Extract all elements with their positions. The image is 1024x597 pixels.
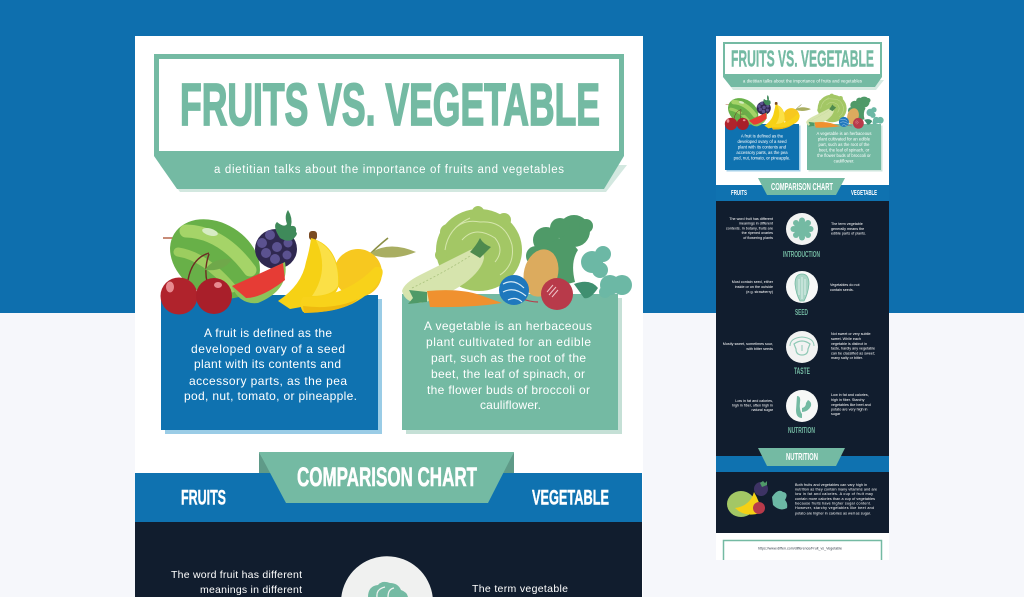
nutrition paragraph: Both fruits and vegetables can vary high in <box>795 483 867 487</box>
row: seed <box>732 271 860 317</box>
seed vegetable text <box>830 283 860 292</box>
intro vegetable text: The term vegetable <box>831 222 863 226</box>
fruit definition text: developed ovary of a seed <box>191 342 345 356</box>
preview fruit illustration <box>723 93 811 130</box>
panel: vegetable definition <box>402 294 622 434</box>
taste vegetable text: vegetable is distinct in <box>831 342 867 346</box>
nutrition fruit text <box>732 399 774 412</box>
intro fruit text: contexts. In botany, fruits are <box>726 226 773 230</box>
watermelon <box>155 203 275 315</box>
fruit intro text: meanings in different <box>200 584 302 596</box>
nutrition fruit text: high in fiber, often high in <box>732 404 773 408</box>
title banner <box>154 54 627 192</box>
preview ribbon <box>758 178 845 195</box>
preview vegetable illustration <box>806 94 884 129</box>
intro fruit text: of flowering plants <box>743 236 773 240</box>
preview fruit text: pod, nut, tomato, or pineapple. <box>734 156 790 160</box>
preview fruit text: developed ovary of a seed <box>737 139 787 144</box>
preview vegetable box <box>807 124 882 172</box>
dark comparison panel <box>135 522 642 597</box>
preview dark panel <box>716 201 889 533</box>
nutrition paragraph: contain more calories than a cup of vegetables <box>795 497 875 501</box>
vegetable definition text: cauliflower. <box>480 398 541 412</box>
taste vegetable text: sweet. While each <box>831 337 861 341</box>
taste vegetable text: many salty or bitter. <box>831 356 863 360</box>
nutrition paragraph: because fruits have higher sugar content. <box>795 501 871 505</box>
intro vegetable text <box>831 222 866 236</box>
zucchini <box>402 238 491 303</box>
illustration: fruits <box>155 203 416 315</box>
vegetable definition text: beet, the leaf of spinach, or <box>431 367 585 381</box>
taste vegetable text: can be classified as sweet; <box>831 351 875 355</box>
nutrition paragraph: low in fat and calories. A cup of fruit may <box>795 492 873 496</box>
preview vegetable text: cauliflower. <box>834 158 854 164</box>
label: taste: TASTE <box>794 366 810 376</box>
small dark leaf <box>574 282 598 298</box>
nutrition fruit text: natural sugar <box>751 408 774 412</box>
preview vegetable text: part, such as the root of the <box>819 142 870 147</box>
potato <box>519 246 563 300</box>
watermelon slice <box>232 262 286 303</box>
preview nutrition band <box>716 456 889 472</box>
preview fruit text: plant with its contents and <box>738 144 787 150</box>
preview fruit box <box>725 124 800 172</box>
lemon with leaf <box>334 238 416 297</box>
illustration: vegetables <box>402 206 632 310</box>
icon: produce shape <box>786 390 818 422</box>
label: nutrition: NUTRITION <box>788 426 815 435</box>
nutrition paragraph: potato are higher in calories as well as sugar. <box>795 512 871 516</box>
source frame <box>724 540 882 560</box>
taste fruit text: Mostly sweet, sometimes sour, <box>723 342 773 346</box>
vegetable definition text: plant cultivated for an edible <box>426 335 591 349</box>
preview nutrition ribbon <box>758 448 845 466</box>
panel: fruit definition <box>161 295 382 434</box>
taste vegetable text <box>831 332 875 360</box>
preview ribbon heading: COMPARISON CHART <box>771 182 833 193</box>
blackberry <box>255 210 297 269</box>
seed fruit text <box>732 280 774 294</box>
intro fruit text: meanings in different <box>739 222 773 226</box>
onion <box>499 275 538 305</box>
nutrition vegetable text: vegetables like beet and <box>831 403 871 407</box>
preview vegetable text <box>817 131 871 164</box>
bananas <box>278 231 383 313</box>
nutrition paragraph <box>795 483 877 516</box>
nutrition paragraph: However, starchy vegetables like beet and <box>795 506 874 510</box>
intro fruit text <box>726 217 773 240</box>
preview vegetable text: the flower buds of broccoli or <box>817 153 871 158</box>
row: nutrition <box>732 390 871 435</box>
row: taste <box>723 331 875 376</box>
preview vegetable text: A vegetable is an herbaceous <box>817 131 871 136</box>
intro vegetable text: edible parts of plants. <box>831 232 866 236</box>
intro fruit text: the ripened ovaries <box>742 231 773 235</box>
fruit definition text: pod, nut, tomato, or pineapple. <box>184 389 357 403</box>
taste vegetable text: Not sweet or very subtle <box>831 332 871 336</box>
preview title: FRUITS VS. VEGETABLE <box>731 46 874 72</box>
nutrition fruit text: Low in fat and calories, <box>735 399 773 403</box>
preview fruit text: A fruit is defined as the <box>741 134 784 138</box>
intro vegetable text: generally means the <box>831 227 864 231</box>
seed vegetable text: Vegetables do not <box>830 283 860 287</box>
comparison band <box>135 473 642 522</box>
illustration: mixed produce <box>727 481 787 517</box>
preview column heading: vegetable: VEGETABLE <box>851 188 877 197</box>
nutrition vegetable text: Low in fat and calories, <box>831 393 869 397</box>
preview comparison band <box>716 185 889 201</box>
icon: flower <box>786 213 818 245</box>
intro fruit text: The word fruit has different <box>729 217 773 221</box>
broccoli <box>526 215 593 286</box>
fruit definition text: A fruit is defined as the <box>204 326 332 340</box>
ribbon: comparison chart <box>259 452 514 503</box>
ribbon heading: COMPARISON CHART <box>297 462 477 492</box>
seed fruit text: Most contain seed, either <box>732 280 774 284</box>
preview vegetable text: beet, the leaf of spinach, or <box>819 148 870 152</box>
nutrition vegetable text: high in fiber. Starchy <box>831 398 865 402</box>
vegetable definition text <box>424 319 592 412</box>
vegetable definition text: A vegetable is an herbaceous <box>424 319 592 333</box>
preview column heading: fruits: FRUITS <box>731 188 747 197</box>
preview fruit text: accessory parts, as the pea <box>736 150 788 155</box>
row: introduction <box>726 213 866 259</box>
vegetable definition text: part, such as the root of the <box>431 351 586 365</box>
ribbon heading: nutrition: NUTRITION <box>786 452 818 463</box>
seed vegetable text: contain seeds. <box>830 288 854 292</box>
taste fruit text <box>723 342 773 351</box>
title: FRUITS VS. VEGETABLE <box>180 72 600 138</box>
seed fruit text: (e.g. strawberry) <box>746 290 773 294</box>
nutrition vegetable text: sugar <box>831 412 841 416</box>
cabbage <box>435 206 522 291</box>
fruit intro text <box>171 569 302 596</box>
seed fruit text: inside or on the outside <box>735 285 773 289</box>
cherries <box>160 253 232 314</box>
subtitle: a dietitian talks about the importance of fruits and vegetables <box>214 164 564 176</box>
nutrition paragraph: nutrition as they contain many vitamins and are <box>795 488 877 492</box>
icon: tongue <box>786 331 818 363</box>
vegetable intro text: The term vegetable <box>472 583 568 595</box>
fruit definition text <box>184 326 357 403</box>
fruit definition text: plant with its contents and <box>194 357 341 371</box>
taste vegetable text: taste, hardly any vegetable <box>831 346 875 350</box>
label: seed: SEED <box>795 308 808 317</box>
taste fruit text: with bitter seeds <box>746 347 773 351</box>
icon circle: introduction <box>341 556 433 597</box>
label: introduction: INTRODUCTION <box>783 250 820 259</box>
panel: small full-page preview <box>716 36 889 560</box>
column heading: vegetable: VEGETABLE <box>532 486 609 510</box>
source url: https://www.diffen.com/difference/Fruit_vs_Vegetable <box>758 546 842 550</box>
carrot <box>408 290 502 307</box>
nutrition vegetable text: potato are very high in <box>831 408 868 412</box>
icon: seed <box>786 271 818 303</box>
preview fruit text <box>734 134 790 160</box>
column heading: fruits: FRUITS <box>181 486 226 510</box>
preview title banner <box>723 42 884 90</box>
preview subtitle: a dietitian talks about the importance of fruits and vegetables <box>743 78 862 84</box>
fruit definition text: accessory parts, as the pea <box>189 374 347 388</box>
nutrition vegetable text <box>831 393 871 416</box>
beet <box>541 278 573 310</box>
teal leaves <box>581 246 632 298</box>
fruit intro text: The word fruit has different <box>171 569 302 581</box>
vegetable definition text: the flower buds of broccoli or <box>427 383 590 397</box>
preview vegetable text: plant cultivated for an edible <box>818 136 871 142</box>
panel: large infographic page <box>135 36 643 597</box>
